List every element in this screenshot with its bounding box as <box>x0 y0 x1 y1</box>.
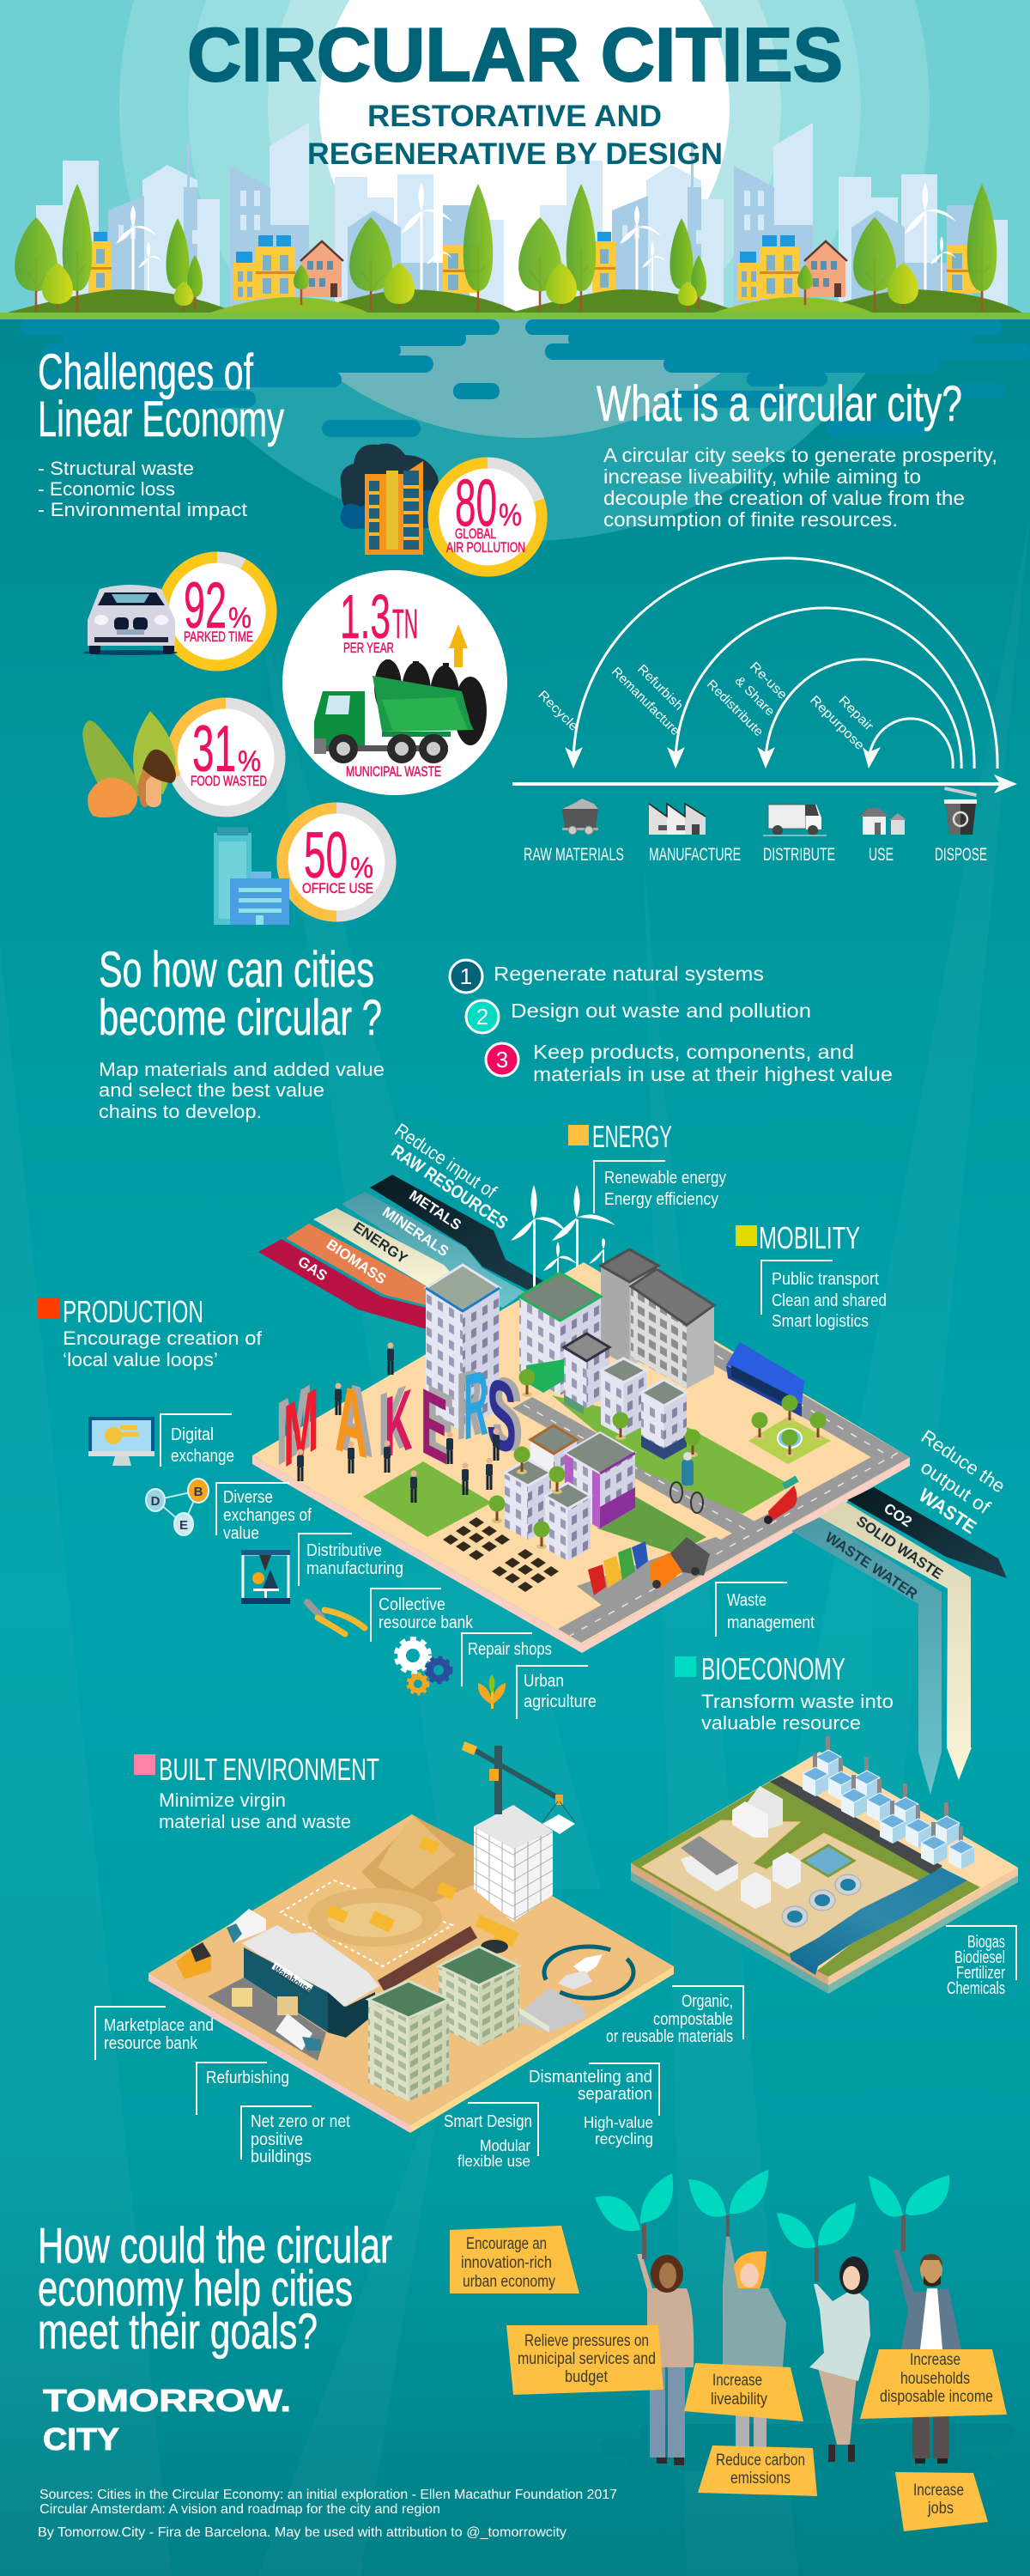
circular city description <box>603 444 997 531</box>
loop arcs <box>573 558 997 769</box>
callout: digital exchange <box>161 1414 234 1467</box>
loop labels: Re-use <box>747 659 790 702</box>
foot shadow <box>601 2424 1015 2471</box>
callout: collective resource bank <box>371 1589 474 1642</box>
callout: net zero: buildings <box>251 2148 312 2166</box>
heading: so how can cities: So how can cities <box>99 942 374 998</box>
callout: diverse exchanges: exchanges of <box>223 1506 312 1525</box>
makers letters: E <box>427 1366 454 1483</box>
excavation pit <box>281 1880 452 1966</box>
callout: waste management <box>716 1583 815 1637</box>
person 3 <box>809 2257 870 2462</box>
icon: food <box>82 711 176 817</box>
bioeconomy label: BIOECONOMY <box>701 1651 845 1686</box>
production label: Encourage creation of <box>63 1327 263 1349</box>
concrete tower <box>474 1805 553 1922</box>
raw resources label: RAW RESOURCES <box>388 1141 512 1233</box>
callout: bio products: Chemicals <box>947 1979 1005 1998</box>
buildings <box>426 1249 714 1561</box>
production label <box>38 1294 263 1370</box>
city skyline tile <box>7 123 518 315</box>
stat: 31% food wasted: FOOD WASTED <box>191 773 267 789</box>
callout: repair shops: Repair shops <box>468 1640 552 1659</box>
callout: diverse exchanges: value <box>223 1524 259 1543</box>
callout: organic materials <box>606 1986 743 2046</box>
stat: 1.3TN municipal waste: PER YEAR <box>343 640 394 656</box>
stat: 50% office use: 50 <box>304 819 348 892</box>
stat: 31% food wasted <box>167 698 285 817</box>
tanks <box>782 1874 861 1927</box>
purple building <box>565 1432 635 1528</box>
callout: smart design: flexible use <box>457 2153 530 2170</box>
heading: so how can cities <box>99 942 382 1046</box>
green lots <box>363 1395 791 1537</box>
platform: bioeconomy plant <box>631 1736 1018 1994</box>
callout: smart design: Modular <box>480 2137 530 2154</box>
stage labels: DISTRIBUTE <box>763 845 835 865</box>
dark hole <box>481 1940 508 1953</box>
stat: 1.3TN municipal waste: MUNICIPAL WASTE <box>346 763 441 780</box>
stat: 80% air pollution <box>428 458 547 576</box>
challenges list: - Economic loss <box>38 478 175 500</box>
note: jobs <box>895 2472 988 2531</box>
stat: 50% office use: % <box>350 852 373 884</box>
trucks <box>176 1909 266 1979</box>
callout: bio products: Biogas <box>967 1933 1005 1952</box>
callout: smart design: Smart Design <box>444 2112 532 2131</box>
heading: challenges: Challenges of <box>38 344 254 400</box>
icon: currency network <box>146 1479 209 1535</box>
road <box>770 1776 942 1874</box>
callout: urban agriculture: Urban <box>524 1672 564 1691</box>
arrow: rising waste <box>449 624 468 667</box>
makers letters: R <box>457 1350 482 1460</box>
white truck <box>276 2014 321 2050</box>
icon: garbage truck <box>314 659 487 763</box>
callout: organic materials: compostable <box>653 2010 733 2029</box>
built environment label <box>134 1752 379 1832</box>
excavators <box>326 1836 519 1947</box>
stat: 92% parked time: PARKED TIME <box>184 629 253 645</box>
icon: polluted city <box>341 443 447 555</box>
raw resource ribbons: METALS <box>406 1187 464 1234</box>
callout: collective resource bank: resource bank <box>379 1613 474 1632</box>
stat: 80% air pollution: AIR POLLUTION <box>446 539 525 556</box>
energy label: Energy efficiency <box>604 1190 718 1209</box>
callout: marketplace: Marketplace and <box>104 2016 214 2035</box>
olive ground <box>631 1779 942 1958</box>
built environment label: BUILT ENVIRONMENT <box>159 1752 379 1787</box>
raw resource ribbons: BIOMASS <box>324 1236 389 1288</box>
waste ribbons: SOLID WASTE <box>853 1513 946 1583</box>
sand mound <box>361 1816 474 1915</box>
intro text: chains to develop. <box>99 1101 262 1122</box>
bus <box>726 1342 804 1417</box>
circular city description: A circular city seeks to generate prosperity, <box>603 444 997 466</box>
stage labels: RAW MATERIALS <box>524 845 624 865</box>
icon: currency network: E <box>179 1518 188 1533</box>
callout: distributive manufacturing: Distributive <box>306 1541 382 1560</box>
park fountain <box>748 1417 831 1464</box>
stage labels: DISPOSE <box>935 845 987 865</box>
stage labels: MANUFACTURE <box>649 845 741 865</box>
stage labels: USE <box>869 845 894 865</box>
stat: 1.3TN municipal waste: TN <box>392 602 418 647</box>
back buildings <box>36 123 504 315</box>
callout: net zero <box>241 2106 350 2166</box>
callout: waste management: Waste <box>727 1591 766 1610</box>
circular city description: increase liveability, while aiming to <box>603 465 921 488</box>
navy trim building <box>641 1380 687 1460</box>
note: carbon: Reduce carbon <box>716 2451 805 2470</box>
bioeconomy label <box>675 1651 894 1734</box>
stat: 92% parked time: % <box>228 602 251 635</box>
built environment label: material use and waste <box>159 1811 351 1832</box>
heading: challenges <box>38 344 284 447</box>
makers letters: S <box>487 1356 517 1477</box>
heading: how could the circular economy: meet their goals? <box>38 2304 318 2360</box>
callout: net zero: Net zero or net <box>251 2112 350 2131</box>
callout: smart design <box>444 2103 538 2170</box>
stat: 80% air pollution: GLOBAL <box>455 526 496 542</box>
wind turbines <box>116 182 452 293</box>
makers letters: M <box>276 1365 312 1485</box>
loop labels: Repurpose <box>807 693 867 753</box>
loop labels: Refurbish <box>634 662 686 714</box>
callout: waste management: management <box>727 1613 815 1632</box>
gray yard <box>208 1978 326 2061</box>
logo: CITY <box>43 2421 119 2457</box>
waste ribbons: CO2 <box>881 1500 915 1530</box>
waste label: WASTE <box>915 1484 980 1538</box>
callout: bio products <box>946 1926 1016 1998</box>
energy label <box>568 1119 726 1213</box>
warehouse <box>232 1925 379 2038</box>
trees <box>15 184 493 312</box>
city skyline repeat <box>511 123 1022 315</box>
title: CIRCULAR CITIES <box>187 12 843 97</box>
note: carbon <box>698 2445 817 2496</box>
note: innovation: Encourage an <box>466 2235 547 2253</box>
linear arrow <box>512 775 1017 793</box>
bicycle <box>670 1452 703 1513</box>
icon: houses <box>859 808 906 835</box>
icon: pliers <box>307 1602 365 1634</box>
waste ribbons: WASTE WATER <box>822 1529 920 1602</box>
mobility label: Public transport <box>772 1270 879 1289</box>
challenges list <box>38 458 247 520</box>
icon: wind turbines <box>511 1185 615 1301</box>
people with plants <box>595 2170 961 2465</box>
brown pipe <box>381 1932 474 1986</box>
principle 1: Regenerate natural systems <box>494 963 764 985</box>
callout: refurbishing: Refurbishing <box>206 2069 289 2087</box>
note: disposable income: households <box>900 2370 970 2388</box>
heading: how could the circular economy: How could the circular <box>38 2218 392 2274</box>
challenges list: - Structural waste <box>38 458 194 479</box>
roads <box>512 1342 910 1643</box>
principle 3 <box>486 1041 893 1085</box>
note: disposable income: Increase <box>910 2351 960 2369</box>
note: municipal services: municipal services and <box>518 2350 656 2368</box>
heading: challenges: Linear Economy <box>38 392 284 447</box>
yellow houses <box>88 232 480 301</box>
note: liveability <box>684 2363 803 2421</box>
principle 1: 1 <box>460 963 472 989</box>
production label: PRODUCTION <box>63 1294 203 1329</box>
icon: factory <box>649 804 706 835</box>
loop labels: Recycle <box>535 688 581 734</box>
loop labels: Redistribute <box>704 677 766 739</box>
small house <box>519 1988 585 2032</box>
people <box>297 1343 500 1503</box>
icon: currency network: B <box>194 1485 203 1499</box>
raw resource ribbons: ENERGY <box>350 1218 411 1267</box>
person 4 <box>894 2250 961 2464</box>
platform: built environment <box>148 1741 674 2133</box>
callout: dismanteling <box>529 2063 659 2148</box>
raw resources label: Reduce input of <box>391 1119 501 1203</box>
mid buildings <box>108 142 470 315</box>
callout: digital exchange: exchange <box>171 1447 234 1466</box>
icon: bin <box>944 787 977 835</box>
mobility label: Smart logistics <box>772 1312 869 1331</box>
callout: bio products: Fertilizer <box>956 1964 1005 1983</box>
subtitle <box>307 100 723 171</box>
icon: gears <box>396 1638 451 1694</box>
green roof tower <box>519 1273 601 1395</box>
gray office block <box>631 1269 714 1388</box>
raw resource ribbons: MINERALS <box>379 1204 451 1260</box>
callout: urban agriculture <box>517 1666 597 1719</box>
callout: diverse exchanges <box>216 1483 312 1543</box>
river bank <box>817 1880 980 1977</box>
person 2 <box>723 2237 786 2450</box>
makers letters: A <box>335 1364 367 1479</box>
diagram: circular loops <box>512 558 1017 865</box>
principle 3: 3 <box>496 1047 508 1072</box>
note: municipal services: Relieve pressures on <box>524 2332 649 2350</box>
heading: how could the circular economy: economy help cities <box>38 2261 353 2317</box>
callout: bio products: Biodiesel <box>954 1948 1005 1967</box>
callout: dismanteling: separation <box>578 2085 652 2104</box>
loop labels <box>535 659 876 753</box>
sources: Sources: Cities in the Circular Economy: an initial exploration - Ellen Macathur Foundation 2017 <box>39 2488 617 2502</box>
loop labels: Repair <box>835 693 876 734</box>
farm plots <box>443 1517 559 1592</box>
logo: TOMORROW. <box>43 2383 291 2418</box>
circular city description: consumption of finite resources. <box>603 508 898 531</box>
raw resource ribbons <box>258 1175 545 1329</box>
stat: 1.3TN municipal waste <box>282 570 507 795</box>
callout: urban agriculture: agriculture <box>524 1692 597 1711</box>
note: innovation: urban economy <box>463 2273 555 2291</box>
hills <box>7 289 518 313</box>
road markings <box>524 1348 898 1636</box>
makers letters: K <box>385 1370 413 1477</box>
principle 2 <box>466 999 811 1033</box>
note: disposable income <box>860 2349 1007 2419</box>
shed <box>681 1836 738 1892</box>
waste label <box>915 1425 1009 1538</box>
water reflection <box>20 0 1030 541</box>
sources <box>38 2488 617 2540</box>
plants <box>595 2170 949 2281</box>
loop labels: Remanufacture <box>609 665 682 738</box>
note: municipal services <box>506 2325 663 2395</box>
offices <box>732 1786 783 1838</box>
callout: distributive manufacturing: manufacturing <box>306 1559 403 1578</box>
stat: 80% air pollution: % <box>499 497 522 532</box>
blue roof tower <box>426 1265 500 1432</box>
mid building <box>601 1358 646 1437</box>
callout: dismanteling: recycling <box>595 2130 653 2148</box>
energy label: Renewable energy <box>604 1169 726 1188</box>
icon: recycle loop <box>544 1947 633 1998</box>
icon: monitor <box>88 1417 154 1466</box>
note: innovation: innovation-rich <box>461 2254 552 2272</box>
raw resource ribbons: GAS <box>294 1253 330 1285</box>
note: innovation <box>450 2226 579 2293</box>
callout: organic materials: Organic, <box>682 1992 733 2011</box>
green roof buildings <box>368 1947 519 2101</box>
built environment label: Minimize virgin <box>159 1789 286 1811</box>
note: municipal services: budget <box>565 2368 609 2386</box>
icon: van <box>763 805 827 836</box>
factories <box>803 1736 974 1869</box>
note: liveability: liveability <box>711 2391 767 2409</box>
production label: ‘local value loops’ <box>63 1349 218 1370</box>
stat: 92% parked time: 92 <box>184 569 227 642</box>
brown roof building <box>530 1425 577 1477</box>
waste truck <box>651 1537 710 1589</box>
sources: By Tomorrow.City - Fira de Barcelona. May be used with attribution to @_tomorrowcity <box>38 2525 566 2540</box>
icon: currency network: D <box>151 1494 161 1509</box>
icon: office buildings <box>214 827 289 925</box>
stat: 50% office use <box>277 803 396 921</box>
callout: dismanteling: Dismanteling and <box>529 2068 652 2087</box>
makers letters: K <box>379 1368 407 1474</box>
principle 1 <box>450 960 764 993</box>
callout: marketplace: resource bank <box>104 2034 198 2053</box>
makers letters: S <box>493 1354 523 1475</box>
loop labels: & Share <box>732 673 778 719</box>
bioeconomy label: valuable resource <box>701 1712 861 1734</box>
sources: Circular Amsterdam: A vision and roadmap for the city and region <box>39 2502 440 2517</box>
makers letters: A <box>340 1363 373 1477</box>
loop arrowheads <box>565 747 881 769</box>
principle 2: Design out waste and pollution <box>511 999 811 1022</box>
stat: 31% food wasted: 31 <box>192 713 236 786</box>
note: carbon: emissions <box>730 2470 791 2488</box>
background rays <box>0 515 1030 2576</box>
heading: how could the circular economy <box>38 2218 392 2360</box>
stat: 50% office use: OFFICE USE <box>302 880 373 896</box>
note: disposable income: disposable income <box>880 2388 993 2406</box>
callout: marketplace <box>95 2007 214 2060</box>
process boxes <box>741 1852 801 1909</box>
sky with sun rings <box>0 0 1030 513</box>
circular city description: decouple the creation of value from the <box>603 487 965 509</box>
principle 3: Keep products, components, and <box>533 1041 854 1063</box>
green shopfront <box>526 1359 584 1414</box>
trees <box>489 1369 826 1549</box>
bioeconomy label: Transform waste into <box>701 1691 894 1712</box>
callout: digital exchange: Digital <box>171 1425 214 1444</box>
recycling bins <box>588 1541 648 1595</box>
subtitle: REGENERATIVE BY DESIGN <box>307 137 723 171</box>
makers letters <box>276 1350 523 1487</box>
warehouse: Warehouse <box>270 1963 314 1996</box>
intro text: and select the best value <box>99 1079 324 1101</box>
ground strip <box>0 313 1030 319</box>
pink house <box>300 241 343 297</box>
callout: collective resource bank: Collective <box>379 1595 445 1614</box>
callout: dismanteling: High-value <box>584 2114 653 2131</box>
pool <box>803 1845 854 1876</box>
challenges list: - Environmental impact <box>38 499 247 520</box>
callout: distributive manufacturing <box>299 1534 403 1586</box>
heading: so how can cities: become circular ? <box>99 990 382 1046</box>
note: jobs: jobs <box>927 2500 954 2518</box>
icon: plant <box>478 1674 506 1709</box>
note: liveability: Increase <box>712 2372 762 2390</box>
callout: diverse exchanges: Diverse <box>223 1488 273 1507</box>
mobility label: MOBILITY <box>759 1220 860 1255</box>
callout: net zero: positive <box>251 2130 303 2149</box>
mobility label: Clean and shared <box>772 1291 887 1310</box>
mobility label <box>736 1220 887 1331</box>
front lilac building <box>505 1460 551 1540</box>
waste label: Reduce the <box>918 1425 1009 1497</box>
crane <box>462 1741 575 1834</box>
scooter <box>764 1476 799 1524</box>
stage labels <box>524 845 987 865</box>
stat: 92% parked time <box>158 552 276 671</box>
icon: 3d printer <box>241 1550 290 1604</box>
makers letters: E <box>421 1369 448 1485</box>
callout: organic materials: or reusable materials <box>606 2027 733 2046</box>
callout: repair shops <box>462 1633 552 1686</box>
front lilac building 2 <box>545 1483 591 1561</box>
icon: car <box>83 585 178 655</box>
energy label: ENERGY <box>592 1119 672 1154</box>
intro text: Map materials and added value <box>99 1059 385 1080</box>
stat: 1.3TN municipal waste: 1.3 <box>340 583 391 652</box>
dark roof building <box>564 1334 609 1408</box>
logo <box>43 2383 291 2457</box>
platform: makers city <box>252 1249 910 1653</box>
stat: 80% air pollution: 80 <box>455 465 497 540</box>
makers letters: M <box>283 1368 319 1487</box>
note: jobs: Increase <box>913 2482 964 2500</box>
subtitle: RESTORATIVE AND <box>367 100 662 133</box>
waste ribbons <box>791 1487 1007 1795</box>
gray tower <box>601 1249 658 1367</box>
waste label: output of <box>917 1456 995 1518</box>
stat: 31% food wasted: % <box>238 745 261 778</box>
intro text <box>99 1059 385 1122</box>
principle 3: materials in use at their highest value <box>533 1063 893 1085</box>
sand lot <box>642 1820 918 1953</box>
makers letters: R <box>464 1351 488 1461</box>
callout: refurbishing <box>197 2063 289 2115</box>
river <box>790 1868 967 1975</box>
person 1 <box>637 2254 694 2465</box>
principle 2: 2 <box>476 1004 488 1030</box>
icon: raw materials <box>562 799 598 835</box>
